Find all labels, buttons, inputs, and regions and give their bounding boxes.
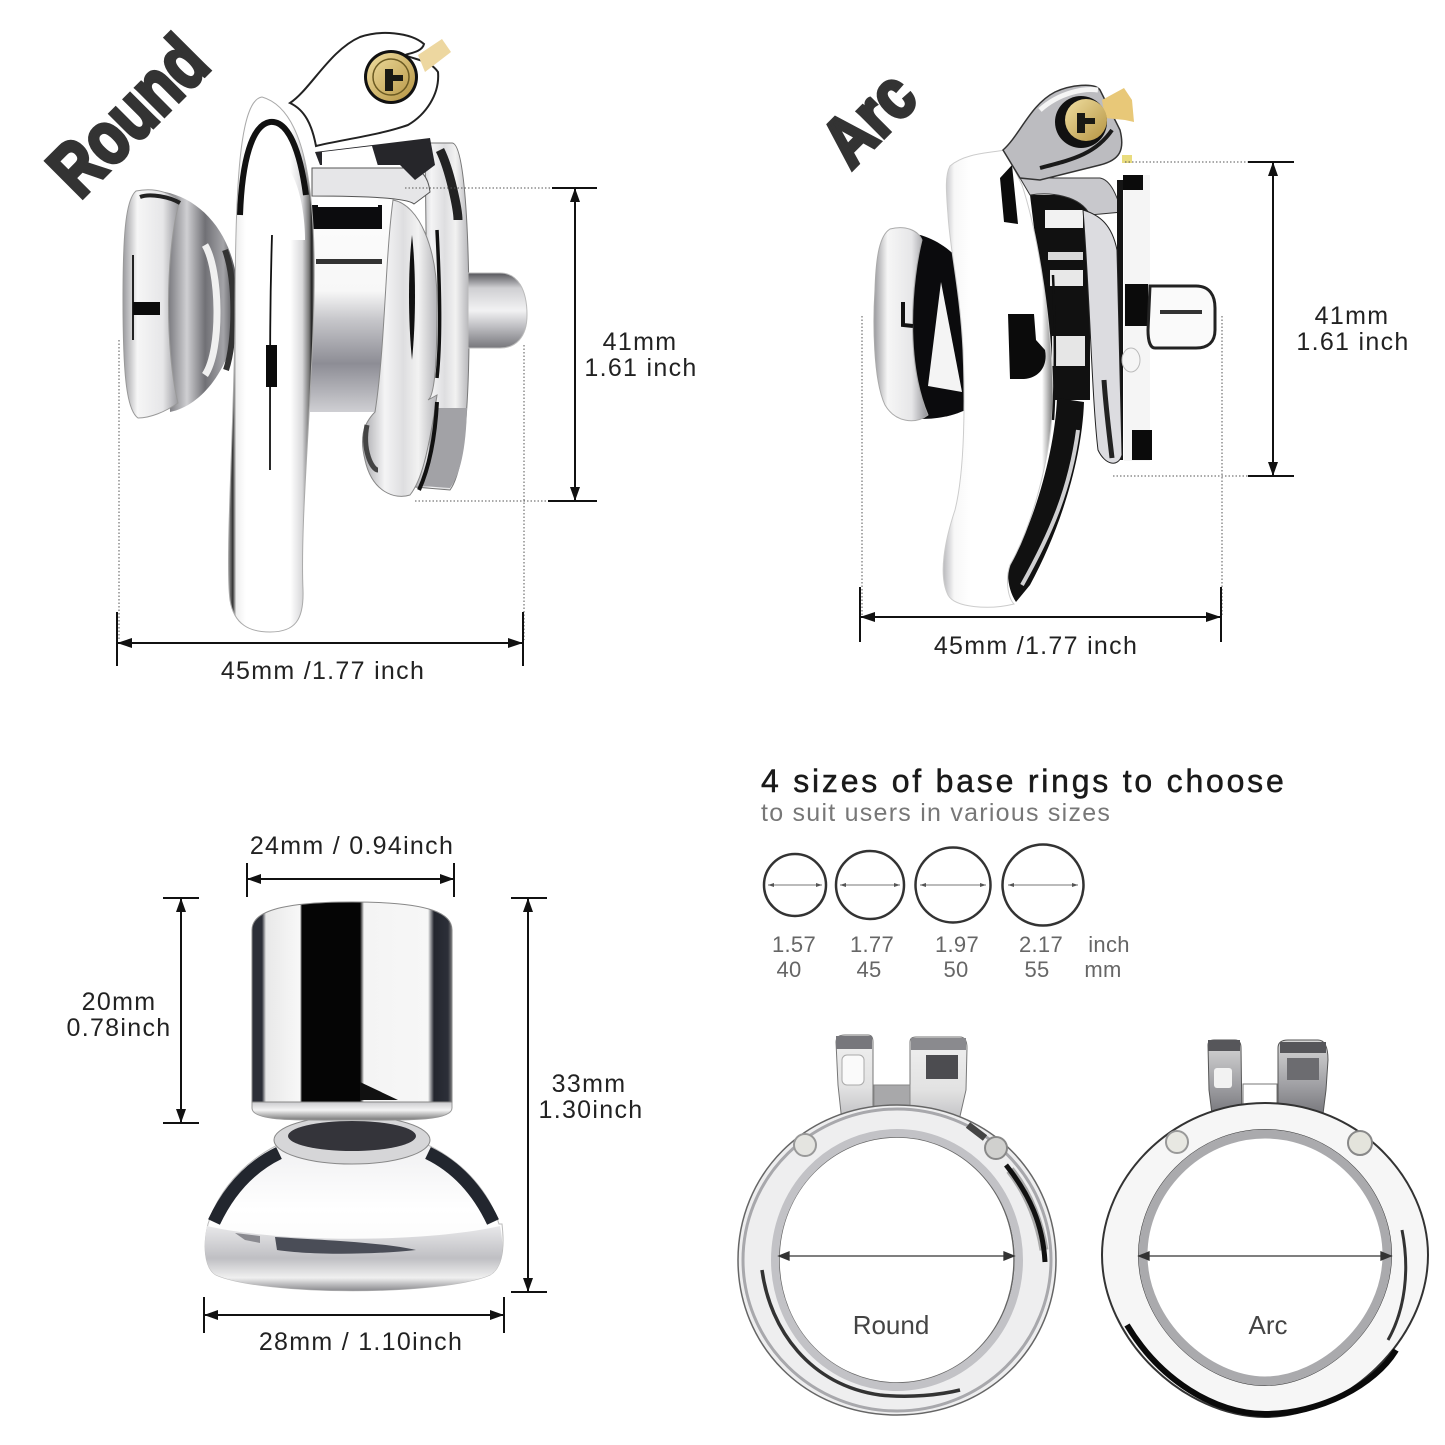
arc lower strut [1008,398,1084,602]
arc mid dark block [1030,195,1090,400]
arc cap rim [874,228,928,421]
size table: 45 [856,957,882,982]
dimension: Arc width: 45mm /1.77 inch [934,632,1138,660]
dimension: plug 20mm [67,898,199,1123]
dimension: Arc height: 1.61 inch [1296,328,1410,356]
dimension: Arc height: 41mm [1315,302,1389,330]
dimension: Round width [117,340,524,685]
arc cylinder [1055,96,1107,148]
round strut highlight [322,146,378,167]
plug dome [205,1128,503,1291]
round ring label: Round [853,1310,929,1340]
size table: 55 [1024,957,1050,982]
round ring right lug [910,1037,967,1125]
arc pin [1148,286,1215,348]
round ring arrow [779,1252,1014,1260]
size table: mm [1084,957,1122,982]
dimension: plug 20mm: 20mm [82,988,156,1016]
arc ring bridge [1243,1084,1277,1122]
size table: 2.17 [1019,932,1063,957]
round cap rim [123,190,180,418]
round ring left lug [836,1035,873,1122]
arc ring arrow [1139,1252,1391,1260]
size table: 40 [776,957,802,982]
ring: Round [738,1035,1056,1415]
round ring bridge [874,1085,910,1124]
arc main body [943,150,1053,607]
round rear plate [415,143,469,490]
round ring body [738,1105,1056,1415]
round cylinder [364,50,418,104]
round dome [165,192,238,412]
size table: 1.97 [935,932,979,957]
device: Arc side view [874,85,1215,607]
dimension: plug 24mm: 24mm / 0.94inch [250,832,454,860]
round main loop [228,97,314,632]
dimension: plug 20mm: 0.78inch [67,1014,171,1042]
plug collar [252,1100,452,1120]
round pin [468,273,527,348]
dimension: Round width: 45mm /1.77 inch [221,657,425,685]
arc key [1102,88,1134,122]
title: Arc: Arc [806,56,931,181]
size table: 50 [943,957,969,982]
dimension: Arc height [1113,162,1410,476]
round lock [290,33,438,146]
dimension: plug 28mm: 28mm / 1.10inch [259,1328,463,1356]
subheading: to suit users in various sizes [761,799,1111,827]
device: Round side view [123,33,527,632]
arc curved plate [1083,210,1122,463]
arc ring left lug [1208,1040,1242,1122]
arc cap black [905,232,975,419]
round struts [315,138,435,180]
round front ring [362,200,437,496]
dimension: plug 24mm [247,832,454,897]
dimension: plug 33mm: 33mm [552,1070,626,1098]
dimension: Round height: 1.61 inch [584,354,698,382]
size table: inch [1088,932,1130,957]
size table: 1.77 [850,932,894,957]
dimension: plug 33mm [511,898,643,1292]
dimension: Arc width [860,316,1222,660]
size table: 1.57 [772,932,816,957]
dimension: plug 28mm [204,1297,504,1356]
ring: Arc [1102,1040,1428,1417]
device: plug detail [205,902,503,1291]
dimension: plug 33mm: 1.30inch [539,1096,643,1124]
round key [418,39,451,72]
round bar [312,168,430,204]
dimension: Round height [405,188,698,501]
arc ring body [1102,1103,1428,1417]
plug cylinder [252,902,452,1102]
arc rear plate [1117,175,1152,461]
arc ring label: Arc [1248,1310,1288,1340]
arc lug [1122,348,1140,372]
plug neck [274,1116,430,1164]
dimension: Round height: 41mm [603,328,677,356]
arc lock [1003,85,1122,180]
arc ring right lug [1278,1040,1328,1122]
size rings [764,844,1084,926]
round barrel [310,170,390,412]
heading: 4 sizes of base rings: 4 sizes of base rings to choose [761,763,1287,799]
size table [772,932,1130,982]
